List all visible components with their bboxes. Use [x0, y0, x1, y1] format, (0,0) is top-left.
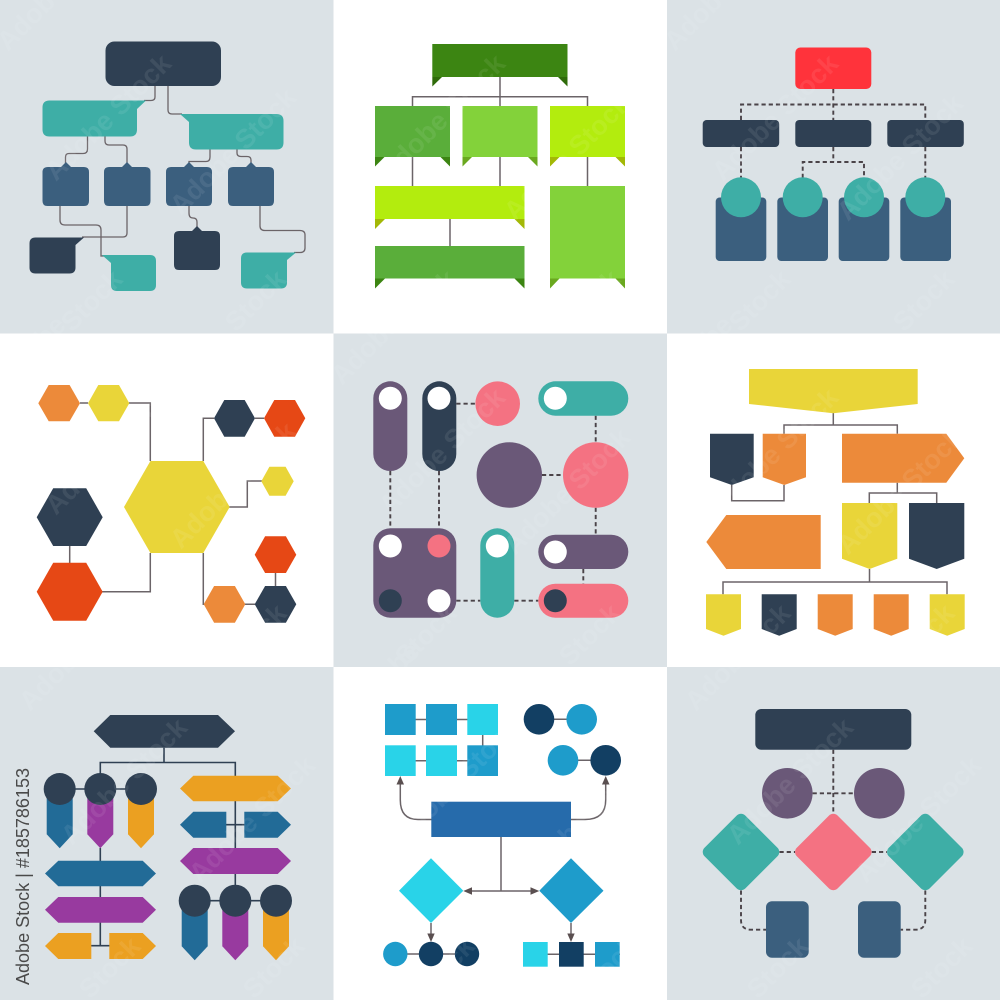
- shield row: small tags: [706, 594, 965, 636]
- connectors: dark lines: [60, 748, 276, 946]
- arrow: orange right: [842, 434, 964, 483]
- connectors: blue panel lines: [395, 719, 620, 954]
- pill: teal vertical: [480, 528, 514, 618]
- dark box row: [703, 120, 964, 147]
- ribbon: row 2 left: [375, 106, 450, 166]
- watermark: diagonal stock text: Adobe: [679, 636, 760, 716]
- dark node: [174, 226, 220, 270]
- panel: pills and circles: [373, 381, 628, 618]
- hexagon: red lower right: [255, 536, 296, 573]
- hanging tags right group: [182, 901, 289, 960]
- watermark: diagonal stock text: Adobe Stock: [183, 750, 322, 888]
- pill: purple vertical: [373, 381, 407, 471]
- diamond: cyan: [399, 858, 463, 923]
- watermark: diagonal stock text: Adobe Stock: [721, 712, 860, 850]
- circle pair lower: [548, 745, 621, 776]
- watermark: diagonal stock text: Adobe: [345, 636, 426, 716]
- circle pair top: [524, 704, 597, 735]
- watermark: diagonal stock text: Adobe Stock: [373, 382, 512, 520]
- circle chain bottom: [383, 942, 479, 966]
- teal bubble left: [42, 100, 146, 136]
- yellow root banner: [749, 369, 918, 413]
- tag: orange right half: [109, 933, 156, 959]
- arrow: orange left: [706, 515, 821, 569]
- circle: pink large: [563, 442, 628, 508]
- shield: dark large: [909, 503, 964, 569]
- watermark: diagonal stock text: Adobe: [325, 310, 406, 390]
- teal circle row: [721, 177, 945, 217]
- watermark: diagonal stock text: Adobe Stock: [498, 88, 637, 226]
- watermark: diagonal stock text: Adobe Stock: [849, 750, 988, 888]
- watermark: diagonal stock text: Stock: [219, 597, 293, 671]
- dark circles right group: [179, 885, 292, 917]
- hexagon: orange top: [38, 385, 80, 421]
- watermark: diagonal stock text: Adobe Stock: [706, 382, 845, 520]
- red root box: [795, 48, 871, 89]
- diamond: pink centre: [793, 811, 874, 893]
- watermark: diagonal stock text: Adobe Stock: [164, 82, 303, 220]
- pill: pink horizontal: [538, 584, 628, 618]
- tag: orange left half: [45, 933, 91, 959]
- panel: tags and arrows chart: [12, 715, 292, 985]
- watermark: diagonal stock text: Stock: [723, 263, 797, 337]
- hexagon: dark lower right: [255, 586, 296, 623]
- tag: purple wide right: [180, 848, 291, 874]
- watermark: diagonal stock text: Stock: [553, 597, 627, 671]
- hexagon: red top right: [264, 400, 305, 437]
- tag: blue wide: [45, 861, 156, 886]
- diamond: blue: [539, 858, 604, 923]
- dark root box: [755, 709, 911, 750]
- tag: blue right half: [244, 812, 291, 838]
- tag: purple wide: [45, 897, 156, 923]
- panel: blue squares, circles and diamonds: [383, 704, 621, 967]
- hanging tags left group: [47, 789, 154, 848]
- dark bubble: [30, 238, 84, 274]
- square chain bottom: [523, 942, 620, 967]
- teal bubble lower: [102, 255, 156, 291]
- connectors: dashed diamond links: [741, 750, 925, 930]
- arrowheads: [396, 776, 610, 942]
- hexagon: small yellow: [261, 467, 294, 496]
- watermark: diagonal stock text: Stock: [723, 597, 797, 671]
- teal bubble right lower: [241, 252, 296, 288]
- watermark: diagonal stock text: Adobe Stock: [373, 48, 512, 186]
- blue node 3: [166, 162, 212, 206]
- blue card right: [858, 901, 901, 958]
- ribbon: tall green: [550, 186, 625, 288]
- watermark: diagonal stock text: Adobe Stock: [39, 48, 178, 186]
- panel: rounded diamonds flow: [700, 709, 966, 958]
- watermark: diagonal stock text: Adobe Stock: [55, 712, 194, 850]
- shield: dark small: [710, 434, 754, 485]
- panel: speech-bubble flowchart: [30, 42, 305, 291]
- hexagon: large dark: [37, 488, 103, 546]
- square grid: [385, 704, 498, 776]
- blue node 4: [228, 162, 274, 206]
- circle: purple large: [477, 442, 542, 508]
- watermark: diagonal stock text: Adobe Stock: [831, 88, 970, 226]
- shield: orange small: [763, 434, 806, 485]
- circle: pink small: [475, 381, 520, 426]
- hexagon: orange lower right: [204, 586, 245, 623]
- ribbon: row 2 centre: [462, 106, 538, 166]
- dark root hexagon: [94, 715, 235, 748]
- panel: shield and arrow chart: [706, 369, 965, 636]
- panel: green ribbon org chart: [375, 44, 625, 288]
- blue card left: [766, 901, 809, 958]
- shield: yellow large: [842, 503, 897, 569]
- watermark: diagonal stock text: Stock: [219, 263, 293, 337]
- ribbon: wide green: [375, 246, 524, 288]
- ribbon: root: [432, 44, 568, 86]
- blue node 1: [42, 162, 89, 206]
- watermark: diagonal stock text: Stock: [887, 597, 961, 671]
- tag: orange wide right: [180, 776, 291, 801]
- watermark: diagonal stock text: Adobe Stock: [831, 422, 970, 560]
- connectors: curved lines: [60, 86, 305, 256]
- tag: blue left half: [180, 812, 226, 838]
- pill: teal horizontal: [538, 381, 628, 416]
- hexagon: dark top right: [214, 400, 255, 437]
- connectors: straight lines: [412, 77, 588, 246]
- connectors: shield lines: [723, 413, 947, 594]
- watermark: diagonal stock text: Adobe: [658, 310, 739, 390]
- watermark: diagonal stock text: Stock: [887, 263, 961, 337]
- watermark: diagonal stock text: Stock: [553, 263, 627, 337]
- pill: dark vertical: [422, 381, 456, 471]
- panel: hexagon map: [37, 385, 305, 623]
- hexagon: large red: [37, 563, 103, 621]
- vertical stock credit: Adobe Stock | #185786153: [12, 768, 33, 985]
- hexagon: large central yellow: [124, 461, 230, 553]
- diamond: teal left: [700, 811, 782, 893]
- teal bubble right: [180, 114, 284, 150]
- watermark: diagonal stock text: Stock: [55, 263, 129, 337]
- ribbon: wide lime: [375, 186, 524, 229]
- connectors: dashed pill links: [390, 404, 596, 601]
- blue node 2: [104, 162, 150, 206]
- root box: [106, 42, 221, 86]
- watermark: diagonal stock text: Adobe Stock: [706, 48, 845, 186]
- watermark: diagonal stock text: Adobe Stock: [387, 712, 526, 850]
- purple circles: [762, 768, 905, 819]
- watermark: diagonal stock text: Stock: [55, 597, 129, 671]
- central blue rectangle: [431, 802, 571, 837]
- ribbon: row 2 right: [550, 106, 625, 166]
- connectors: dashed: [741, 89, 925, 178]
- dark circles left group: [44, 773, 157, 805]
- watermark: diagonal stock text: Stock: [389, 597, 463, 671]
- hexagon: yellow top: [88, 385, 129, 421]
- panel: dashed hierarchy with circles: [703, 48, 964, 261]
- diamond: teal right: [885, 811, 966, 893]
- watermark: diagonal stock text: Adobe Stock: [164, 416, 303, 554]
- pill: purple horizontal: [538, 535, 628, 569]
- watermark: diagonal stock text: Adobe Stock: [515, 750, 654, 888]
- watermark: diagonal stock text: Adobe Stock: [39, 382, 178, 520]
- blue card row: [716, 198, 951, 261]
- watermark: diagonal stock text: Adobe: [13, 636, 94, 716]
- watermark: diagonal stock text: Stock: [389, 263, 463, 337]
- rounded square with four dots: [373, 528, 456, 618]
- watermark: diagonal stock text: Adobe Stock: [498, 422, 637, 560]
- connectors: hexagon lines: [70, 403, 276, 604]
